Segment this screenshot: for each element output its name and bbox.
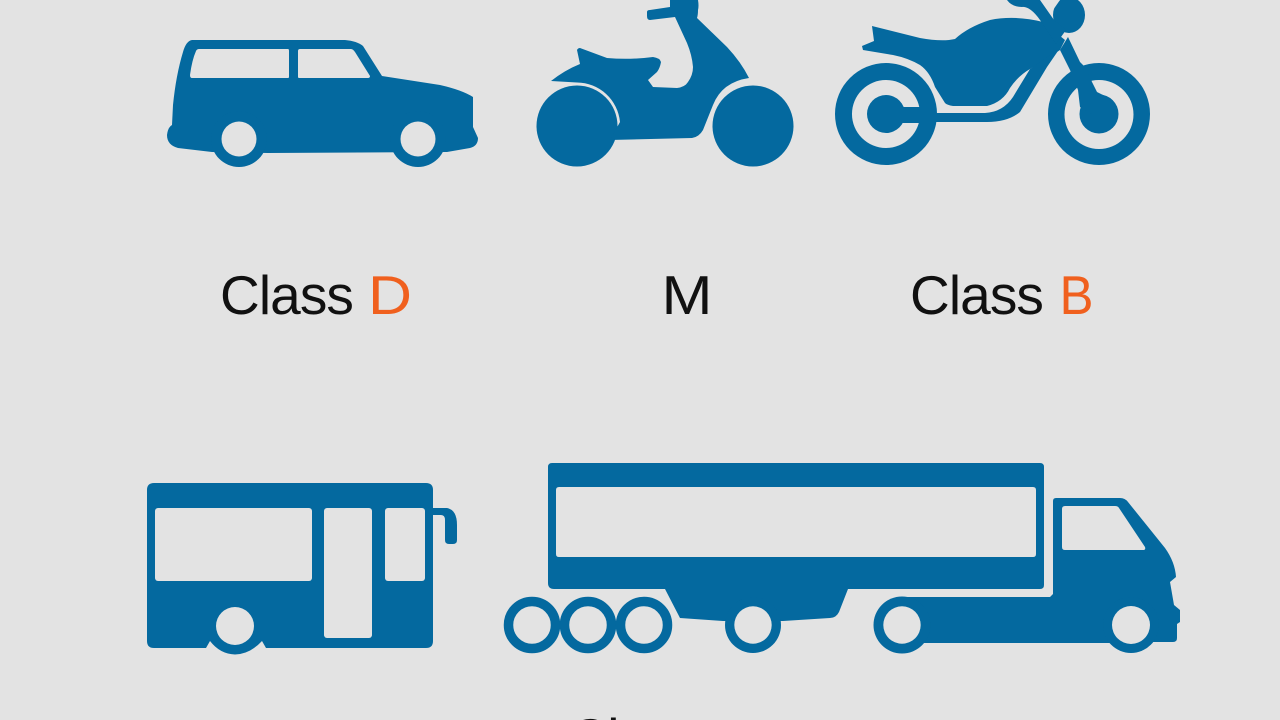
- icon: bus: [147, 483, 457, 654]
- label: Class D: Class: [220, 264, 353, 326]
- rear axle wheels: [508, 602, 668, 648]
- label: Class B: B: [1060, 264, 1094, 326]
- icon: motorcycle: [835, 0, 1150, 165]
- tractor cab: [902, 498, 1180, 643]
- icon: bus mirror: [433, 508, 457, 544]
- icon: car: [167, 40, 478, 167]
- label: M: M: [662, 264, 712, 326]
- label: Class B: Class: [910, 264, 1043, 326]
- label: Class D: [220, 264, 412, 326]
- label: Class D: D: [368, 264, 412, 326]
- icon: scooter: [536, 0, 794, 166]
- icon: articulated truck: [508, 463, 1180, 654]
- trailer: [548, 463, 1044, 621]
